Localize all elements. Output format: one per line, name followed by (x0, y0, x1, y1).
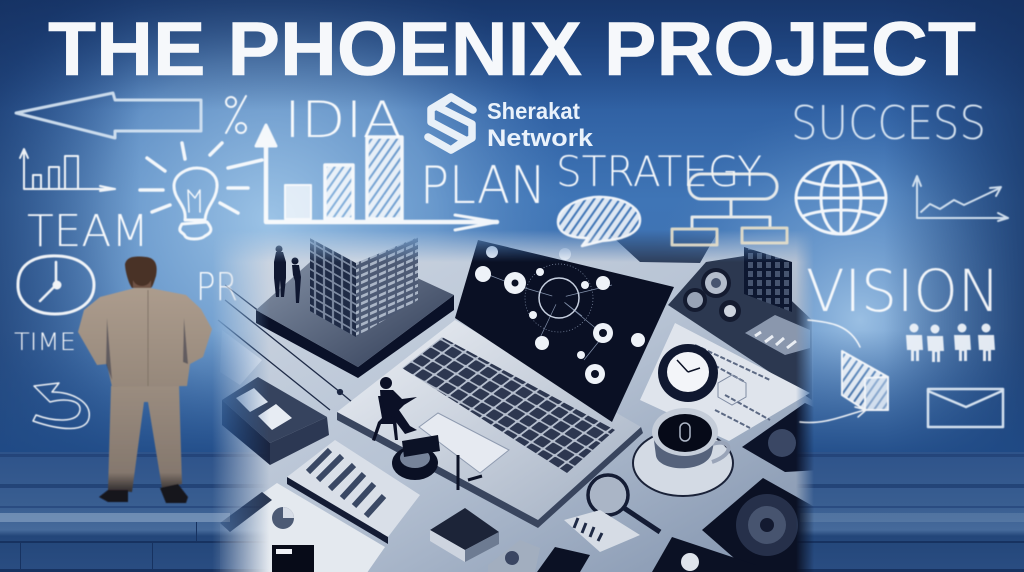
icon: org chart (672, 174, 787, 245)
icon: laptop (337, 240, 674, 528)
icon: dark tablets on the right (702, 403, 820, 572)
icon: data platform with building (256, 238, 454, 378)
text: logo second line: Network (487, 125, 594, 152)
icon: light bulb (140, 143, 262, 239)
icon: dark instrument panel with gauges (668, 247, 812, 400)
icon: four people (906, 324, 995, 362)
icon: file trays (222, 377, 329, 465)
icon: server with flow arrows (800, 320, 888, 423)
chalk overlay on collage (558, 162, 1008, 427)
icon: coffee cup on saucer (633, 408, 733, 496)
text: IDIA: IDIA (284, 91, 402, 149)
chalk words, right (791, 96, 1000, 325)
icon: small chart on desk (564, 510, 640, 552)
icon: speech bubble (558, 197, 640, 246)
icon: magnifying glass (588, 475, 660, 532)
icon: envelope (928, 389, 1003, 427)
text: SUCCESS: SUCCESS (791, 96, 986, 150)
icon: bar chart paper (287, 440, 420, 544)
figure: man in a suit seen from behind (78, 257, 212, 503)
text: PLAN: PLAN (420, 156, 546, 216)
icon: logo S mark (428, 97, 473, 150)
chalk clock and return arrow (18, 256, 94, 429)
head (125, 257, 157, 288)
laptop screen network (489, 264, 612, 360)
text: PR fragment: PR (196, 265, 238, 309)
icon: potted desk tray (430, 508, 499, 562)
icon: U-turn arrow (33, 383, 89, 429)
panel: desk surface (200, 225, 830, 572)
laptop screen (455, 240, 674, 422)
dark tablet behind the laptop (610, 232, 716, 263)
text: STRATEGY: STRATEGY (556, 147, 762, 196)
icon: globe (796, 162, 886, 234)
laptop keyboard (402, 337, 615, 473)
circuit lines and small chart at left (218, 285, 352, 410)
icon: wall clock on desk (658, 344, 718, 402)
logo: Sherakat Network (428, 97, 594, 152)
icon: clock (18, 256, 94, 314)
text: TIME: TIME (14, 328, 76, 356)
chalk words, left and centre (14, 91, 762, 356)
jacket (78, 288, 212, 387)
icon: percent sign (226, 96, 246, 133)
text: logo first line: Sherakat (487, 98, 580, 124)
seated figure silhouette (372, 377, 417, 441)
chalk drawings, left and centre (16, 93, 497, 239)
floor: stone steps (0, 452, 1024, 572)
icon: rising line chart (913, 176, 1008, 221)
panel: report clipboard (220, 483, 385, 572)
title: THE PHOENIX PROJECT (48, 7, 976, 92)
panel: printed charts sheet (640, 323, 810, 441)
icon: big left arrow (16, 93, 201, 138)
small podium with box (392, 435, 482, 490)
text: TEAM: TEAM (27, 206, 149, 257)
collage: laptop desk scene (200, 222, 830, 572)
icon: bottom gadgets and phone (488, 537, 756, 572)
icon: small bar chart (20, 149, 115, 191)
legs (108, 384, 182, 492)
text: VISION: VISION (806, 257, 1000, 325)
shoes (99, 484, 188, 503)
icon: growth bar chart with axes (256, 125, 497, 230)
laptop trackpad (419, 413, 509, 473)
